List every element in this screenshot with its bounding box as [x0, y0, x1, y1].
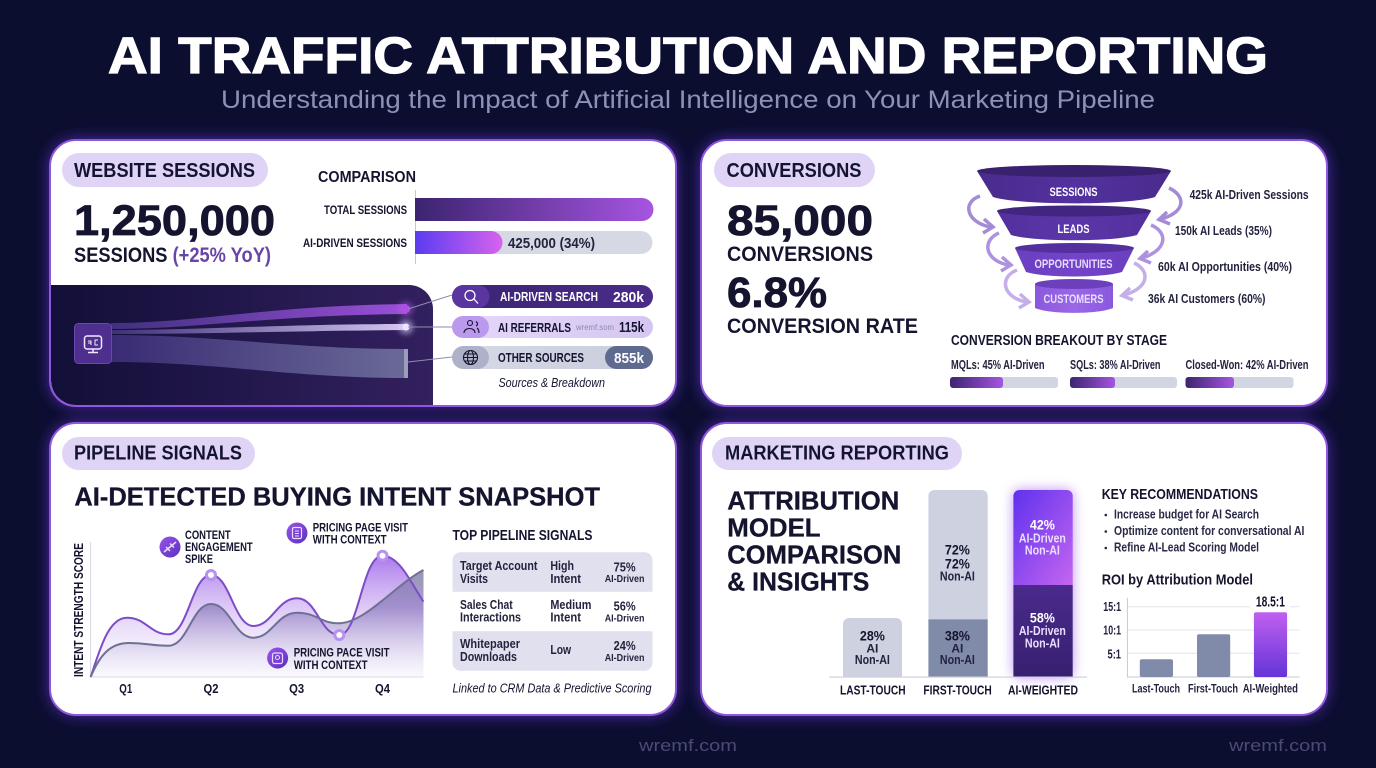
- callout: pricing page visit top: [286, 521, 409, 547]
- bar: first-touch: 38%: [945, 628, 970, 644]
- area chart: intent strength: Q3: [289, 681, 304, 696]
- row: whitepaper downloads: Low: [550, 642, 572, 657]
- flow: other sources: [111, 335, 407, 378]
- heading pill: conversions: [714, 153, 875, 187]
- bar: AI-weighted: Non-AI: [1025, 542, 1060, 557]
- funnel stage labels: 60k AI Opportunities (40%): [1158, 260, 1292, 274]
- stacked bar chart: attribution models: LAST-TOUCH: [840, 682, 906, 697]
- recommendations list: [1104, 508, 1304, 555]
- bar: AI-weighted: AI-Driven: [1019, 530, 1066, 545]
- panel: marketing reporting: [701, 423, 1327, 715]
- icon: AI monitor: [74, 324, 112, 364]
- funnel stage labels: 36k AI Customers (60%): [1148, 292, 1266, 306]
- row: whitepaper downloads: Whitepaper: [460, 636, 520, 651]
- subtitle: Understanding the Impact of Artificial Intelligence on Your Marketing Pipeline: [221, 86, 1155, 114]
- big number: sessions: 1,250,000: [74, 197, 275, 245]
- row: target account visits: High: [550, 558, 574, 573]
- funnel: customers: [1035, 279, 1113, 313]
- comparison bar chart: [303, 190, 654, 264]
- callout: pricing page visit top: WITH CONTEXT: [313, 533, 387, 547]
- area chart: intent strength: Q4: [375, 681, 391, 696]
- breakout bars: Closed-Won: 42% AI-Driven: [1186, 358, 1308, 372]
- bar: AI-weighted: Non-AI: [1025, 635, 1060, 650]
- row: whitepaper downloads: AI-Driven: [605, 652, 644, 664]
- source: AI-driven search: [452, 285, 653, 308]
- bar: first-touch: AI: [951, 642, 963, 656]
- row: target account visits: Intent: [550, 571, 582, 586]
- sankey panel: sources flow: [50, 285, 433, 405]
- big number: conversion rate: 6.8%: [727, 269, 827, 317]
- conversion breakout heading: CONVERSION BREAKOUT BY STAGE: [951, 333, 1167, 349]
- bar: last-touch: Non-AI: [855, 653, 890, 667]
- source: AI-driven search: 280k: [613, 289, 645, 306]
- funnel flow arrows: [969, 188, 1181, 308]
- comparison bar chart: TOTAL SESSIONS: [324, 203, 407, 217]
- funnel: opportunities: OPPORTUNITIES: [1034, 257, 1112, 271]
- sources caption: Sources & Breakdown: [498, 375, 605, 390]
- stacked bar chart: attribution models: AI-WEIGHTED: [1008, 682, 1078, 697]
- recommendations list: Optimize content for conversational AI: [1114, 524, 1304, 538]
- signals table: [452, 552, 652, 671]
- funnel stage labels: 425k AI-Driven Sessions: [1190, 188, 1309, 202]
- row: target account visits: Visits: [460, 571, 488, 586]
- table caption: Linked to CRM Data & Predictive Scoring: [452, 681, 652, 696]
- recommendations list: Refine AI-Lead Scoring Model: [1114, 541, 1259, 555]
- chart heading: AI-DETECTED BUYING INTENT SNAPSHOT: [74, 482, 600, 512]
- row: sales chat interactions: AI-Driven: [605, 613, 644, 625]
- comparison bar chart: AI-DRIVEN SESSIONS: [303, 236, 407, 250]
- flow: AI-driven search: [111, 304, 407, 329]
- ROI bar chart: 5:1: [1108, 646, 1121, 661]
- attribution heading: MODEL: [727, 513, 821, 543]
- signals table heading: TOP PIPELINE SIGNALS: [452, 527, 592, 544]
- source: other sources: [452, 346, 653, 369]
- callout: pricing page visit bottom: WITH CONTEXT: [294, 658, 368, 672]
- callout: pricing page visit bottom: [267, 646, 390, 672]
- bar: first-touch: Non-AI: [940, 569, 975, 583]
- stacked bar chart: attribution models: FIRST-TOUCH: [923, 682, 992, 697]
- row: target account visits: [460, 558, 644, 586]
- ROI bar chart: 10:1: [1103, 622, 1121, 637]
- panel: conversions: [701, 140, 1327, 406]
- source: other sources: 855k: [614, 350, 645, 367]
- source: AI-driven search: AI-DRIVEN SEARCH: [500, 289, 598, 304]
- heading pill: conversions: CONVERSIONS: [726, 160, 862, 182]
- panel: website sessions: [50, 140, 676, 406]
- funnel: leads: [997, 206, 1151, 240]
- bar: AI-weighted: [1013, 490, 1073, 677]
- ROI bar chart: Last-Touch: [1132, 682, 1180, 696]
- bar: AI-weighted: 58%: [1030, 609, 1055, 625]
- source: other sources: OTHER SOURCES: [498, 350, 584, 365]
- attribution heading: & INSIGHTS: [727, 567, 869, 597]
- funnel: customers: CUSTOMERS: [1044, 292, 1104, 306]
- heading pill: website sessions: WEBSITE SESSIONS: [74, 160, 255, 182]
- funnel: leads: LEADS: [1058, 222, 1090, 236]
- source: AI referrals: [452, 316, 653, 338]
- bar: first-touch: 72%: [945, 541, 970, 557]
- ROI bar chart: 18.5:1: [1256, 595, 1285, 611]
- title: AI TRAFFIC ATTRIBUTION AND REPORTING: [108, 27, 1268, 84]
- ROI heading: ROI by Attribution Model: [1102, 571, 1253, 588]
- heading pill: marketing reporting: MARKETING REPORTING: [725, 442, 949, 464]
- row: sales chat interactions: Interactions: [460, 610, 521, 625]
- source: AI referrals: 115k: [619, 319, 645, 336]
- callout: pricing page visit bottom: PRICING PACE VISIT: [294, 646, 390, 660]
- callout: pricing page visit top: PRICING PAGE VISIT: [313, 521, 409, 535]
- footer watermark right: wremf.com: [1228, 736, 1327, 755]
- callout: content engagement spike: SPIKE: [185, 552, 213, 566]
- attribution heading: [727, 485, 901, 597]
- callout: content engagement spike: CONTENT: [185, 528, 231, 542]
- funnel stage labels: [1148, 188, 1309, 306]
- funnel stage labels: 150k AI Leads (35%): [1175, 224, 1272, 238]
- area chart: intent strength: [71, 542, 424, 696]
- source: AI referrals: AI REFERRALS: [498, 320, 571, 335]
- comparison bar chart: 425,000 (34%): [508, 235, 595, 252]
- funnel diagram: [977, 165, 1171, 313]
- bar: first-touch: [928, 490, 988, 677]
- area chart: intent strength: Q2: [204, 681, 218, 696]
- ROI bar chart: AI-Weighted: [1243, 682, 1298, 696]
- source: AI referrals: wremf.som: [575, 323, 614, 332]
- heading pill: pipeline signals: PIPELINE SIGNALS: [74, 442, 242, 464]
- row: sales chat interactions: Sales Chat: [460, 597, 513, 612]
- bar: AI-weighted: 42%: [1030, 516, 1055, 532]
- row: sales chat interactions: 56%: [614, 599, 636, 614]
- row: target account visits: AI-Driven: [605, 573, 644, 585]
- sessions caption: SESSIONS (+25% YoY): [74, 244, 271, 267]
- callout: content engagement spike: ENGAGEMENT: [185, 540, 253, 554]
- conversion rate caption: CONVERSION RATE: [727, 315, 918, 338]
- y axis label: INTENT STRENGTH SCORE: [71, 543, 86, 677]
- row: whitepaper downloads: [460, 636, 644, 664]
- heading pill: marketing reporting: [712, 437, 962, 470]
- breakout bars: SQLs: 38% AI-Driven: [1070, 358, 1160, 372]
- ROI bar chart: 15:1: [1103, 599, 1121, 614]
- callout: content engagement spike: [160, 528, 253, 566]
- breakout bars: [950, 358, 1308, 388]
- flow: AI referrals: [111, 324, 407, 334]
- stacked bar chart: attribution models: [829, 490, 1087, 697]
- footer watermark centre: wremf.com: [638, 736, 737, 755]
- comparison heading: COMPARISON: [318, 169, 416, 186]
- funnel: opportunities: [1015, 243, 1134, 276]
- panel: pipeline signals: [50, 423, 676, 715]
- funnel: sessions: [977, 165, 1171, 203]
- row: target account visits: 75%: [614, 560, 636, 575]
- key recommendations heading: KEY RECOMMENDATIONS: [1102, 486, 1258, 503]
- bar: last-touch: [843, 618, 902, 677]
- row: whitepaper downloads: Downloads: [460, 649, 517, 664]
- bar: AI-weighted: AI-Driven: [1019, 623, 1066, 638]
- ROI bar chart: First-Touch: [1188, 682, 1238, 696]
- attribution heading: ATTRIBUTION: [727, 485, 899, 515]
- conversions caption: CONVERSIONS: [727, 243, 873, 266]
- row: sales chat interactions: [460, 597, 644, 625]
- breakout bars: MQLs: 45% AI-Driven: [951, 358, 1044, 372]
- heading pill: website sessions: [62, 153, 268, 187]
- ROI bar chart: [1103, 595, 1300, 696]
- bar: first-touch: Non-AI: [940, 653, 975, 667]
- bar: last-touch: 28%: [860, 628, 885, 644]
- funnel: sessions: SESSIONS: [1050, 185, 1098, 199]
- bar: last-touch: AI: [866, 642, 878, 656]
- bar: first-touch: 72%: [945, 555, 970, 571]
- big number: conversions: 85,000: [727, 197, 873, 245]
- row: sales chat interactions: Intent: [550, 610, 582, 625]
- recommendations list: Increase budget for AI Search: [1114, 508, 1259, 522]
- attribution heading: COMPARISON: [727, 539, 901, 569]
- row: target account visits: Target Account: [460, 558, 538, 573]
- area chart: intent strength: Q1: [119, 681, 132, 696]
- row: whitepaper downloads: 24%: [614, 638, 636, 653]
- row: sales chat interactions: Medium: [550, 597, 591, 612]
- heading pill: pipeline signals: [62, 437, 255, 470]
